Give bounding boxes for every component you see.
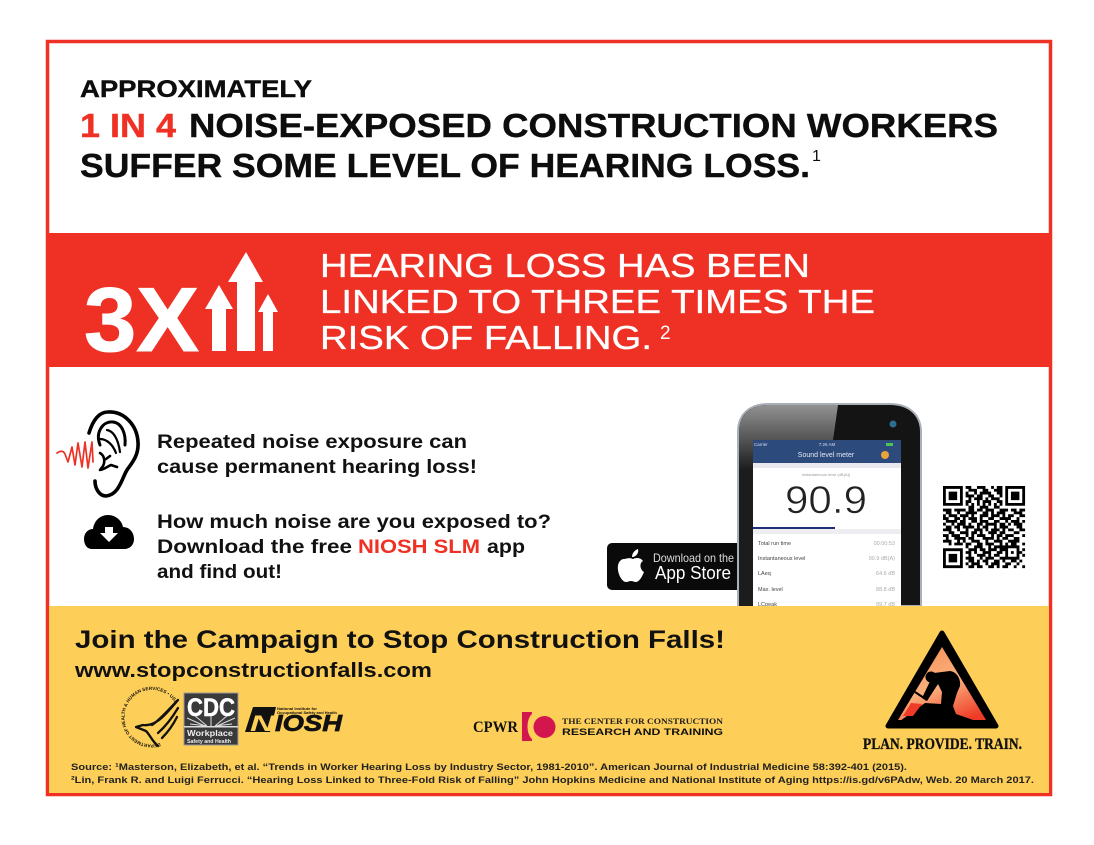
app screen: 99.7 dB [876, 602, 895, 608]
app screen: Total run time [758, 541, 791, 547]
app screen: 00:00:53 [874, 541, 895, 547]
icon: worker warning triangle [888, 633, 996, 726]
text: download call to action: app [487, 537, 525, 558]
risk of falling statement: 2 [660, 323, 671, 344]
app screen [753, 440, 901, 608]
heading: hearing loss statistic: NOISE-EXPOSED CONSTRUCTION WORKERS [189, 107, 998, 144]
logo: CPWR: THE CENTER FOR CONSTRUCTION [562, 716, 724, 726]
logo: CDC Workplace Safety and Health: Workplace [187, 729, 234, 738]
logo: NIOSH [245, 707, 342, 736]
badge: App Store: App Store [655, 562, 731, 583]
logo: CDC Workplace Safety and Health [184, 693, 238, 745]
text: download call to action [157, 512, 551, 583]
heading: hearing loss statistic: SUFFER SOME LEVEL OF HEARING LOSS. [80, 147, 810, 184]
logo: NIOSH: N [250, 711, 277, 736]
icon: ear with noise wave [57, 412, 138, 496]
badge: App Store [607, 543, 742, 590]
app screen: 90.9 [785, 479, 867, 522]
text: download call to action: NIOSH SLM [358, 537, 480, 558]
tagline: Plan. Provide. Train.: PLAN. PROVIDE. TRAIN. [863, 736, 1022, 753]
logo: NIOSH: IOSH [275, 710, 342, 736]
source citations: ²Lin, Frank R. and Luigi Ferrucci. “Hearing Loss Linked to Three-Fold Risk of Falling” John Hopkins Medicine and National Institute of Aging https://is.gd/v6PAdw, Web. 20 March 2017. [71, 775, 1034, 786]
logo: CPWR [473, 712, 724, 741]
text: download call to action: Download the free [157, 537, 352, 558]
QR code [943, 487, 1025, 567]
source citations: Source: ¹Masterson, Elizabeth, et al. “Trends in Worker Hearing Loss by Industry Sector, 1981-2010”. American Journal of Industrial Medicine 58:392-401 (2015). [71, 762, 907, 773]
panel: red risk band [49, 233, 1049, 371]
app screen: LCpeak [758, 602, 777, 608]
risk of falling statement: LINKED TO THREE TIMES THE [320, 284, 875, 321]
risk of falling statement: HEARING LOSS HAS BEEN [320, 248, 810, 285]
app screen: 64.6 dB [876, 571, 895, 577]
icon: three rising arrows [205, 252, 278, 351]
heading: hearing loss statistic: 1 [812, 148, 821, 165]
risk of falling statement: RISK OF FALLING. [320, 320, 652, 357]
app screen: 88.8 dB [876, 587, 895, 593]
logo: NIOSH: Occupational Safety and Health [277, 711, 337, 715]
logo: CDC Workplace Safety and Health: CDC [187, 694, 235, 722]
campaign heading: Join the Campaign to Stop Construction Falls! [75, 626, 725, 654]
text: noise exposure warning [157, 432, 477, 478]
logo: CPWR: CPWR [473, 719, 519, 736]
app screen: 90.9 dB(A) [869, 556, 895, 562]
risk of falling statement [320, 248, 875, 357]
text: download call to action: How much noise are you exposed to? [157, 512, 551, 533]
app screen: 7:26 AM [819, 442, 836, 447]
heading: hearing loss statistic [80, 76, 998, 184]
heading: hearing loss statistic: APPROXIMATELY [80, 76, 312, 103]
app screen: Sound level meter [798, 452, 855, 459]
app screen: LAeq [758, 571, 771, 577]
heading: hearing loss statistic: 1 IN 4 [80, 107, 177, 144]
panel: campaign footer [49, 606, 1049, 793]
icon: cloud download [84, 515, 134, 549]
logo: HHS: DEPARTMENT OF HEALTH & HUMAN SERVICES • USA [121, 686, 176, 748]
text: download call to action: and find out! [157, 562, 282, 583]
app screen: Instantaneous level (dB(A)) [802, 472, 851, 477]
badge: App Store: Download on the [653, 551, 734, 565]
logo: NIOSH: National Institute for [277, 707, 318, 711]
app screen: Instantaneous level [758, 556, 805, 562]
campaign URL: www.stopconstructionfalls.com [74, 659, 432, 682]
app screen: Carrier [754, 442, 768, 447]
app screen: Max. level [758, 587, 783, 593]
3X figure: 3X [84, 270, 199, 371]
text: noise exposure warning: cause permanent hearing loss! [157, 457, 477, 478]
logo: CPWR: RESEARCH AND TRAINING [562, 727, 723, 738]
logo: CDC Workplace Safety and Health: Safety and Health [187, 739, 231, 745]
source citations [71, 762, 1034, 786]
phone showing sound level meter app [738, 404, 921, 608]
text: noise exposure warning: Repeated noise exposure can [157, 432, 467, 453]
